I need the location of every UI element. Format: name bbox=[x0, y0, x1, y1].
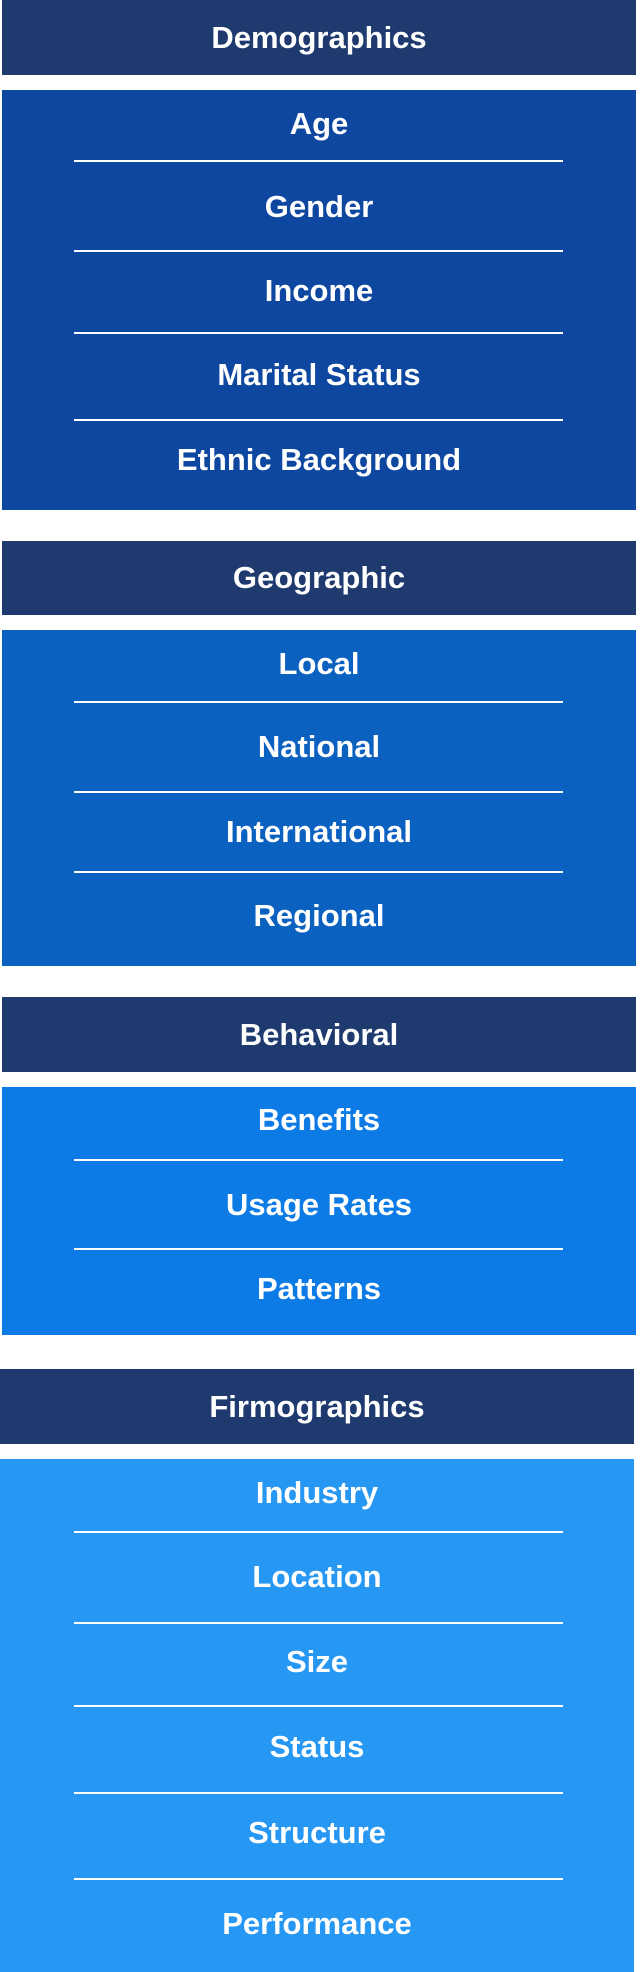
header: Geographic: Geographic bbox=[233, 560, 405, 595]
item: Gender: Gender bbox=[265, 189, 373, 224]
item: Marital Status: Marital Status bbox=[217, 357, 421, 392]
item: Size: Size bbox=[286, 1644, 348, 1679]
item: Usage Rates: Usage Rates bbox=[226, 1187, 412, 1222]
header: Firmographics bbox=[0, 1369, 634, 1444]
item: Regional: Regional bbox=[254, 898, 384, 933]
item: International: International bbox=[226, 814, 412, 849]
panel: firmographics bbox=[0, 1459, 634, 1972]
header: Firmographics: Firmographics bbox=[209, 1388, 425, 1424]
header: Behavioral bbox=[2, 997, 636, 1072]
item: Ethnic Background: Ethnic Background bbox=[177, 442, 461, 477]
header: Demographics bbox=[2, 0, 636, 75]
header: Behavioral: Behavioral bbox=[240, 1016, 398, 1052]
item: Benefits: Benefits bbox=[258, 1102, 380, 1137]
header: Demographics: Demographics bbox=[211, 20, 427, 54]
item: Performance: Performance bbox=[222, 1906, 412, 1941]
item: National: National bbox=[258, 729, 380, 764]
item: Local: Local bbox=[279, 646, 359, 681]
item: Structure: Structure bbox=[248, 1815, 386, 1850]
panel: behavioral bbox=[2, 1087, 636, 1335]
item: Industry: Industry bbox=[256, 1475, 378, 1510]
item: Income: Income bbox=[265, 273, 373, 308]
item: Status: Status bbox=[270, 1729, 364, 1764]
panel: geographic bbox=[2, 630, 636, 966]
item: Location: Location bbox=[252, 1559, 382, 1594]
item: Age: Age bbox=[290, 106, 348, 141]
item: Patterns: Patterns bbox=[257, 1271, 381, 1306]
header: Geographic bbox=[2, 541, 636, 615]
panel: demographics bbox=[2, 90, 636, 510]
